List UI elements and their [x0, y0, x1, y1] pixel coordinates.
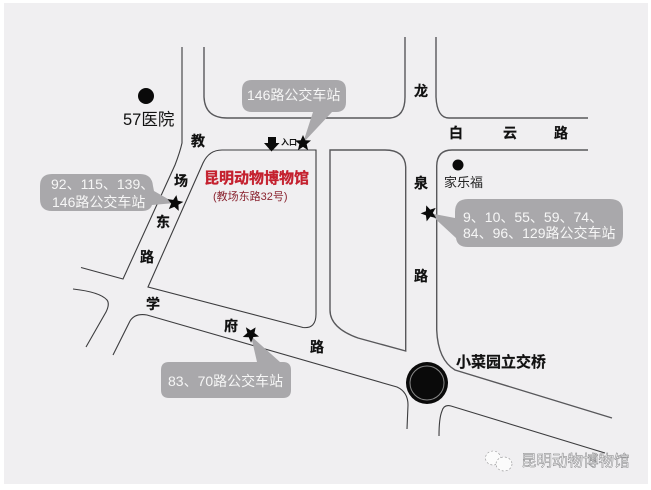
callout: 9 10 55 59 74 84 96 129 bus stop: 84、96、129路公交车站: [463, 225, 616, 241]
road name: 白云路: 云: [503, 125, 517, 141]
icon: bus stop star on 教场东路: [166, 194, 184, 211]
landmark: Carrefour: [444, 160, 483, 190]
museum name: [204, 169, 309, 203]
road name: 教场东路: 场: [174, 173, 188, 189]
callout: 83 70 bus stop: [161, 336, 291, 398]
overpass label: 小菜园立交桥: [456, 353, 546, 371]
road name: 学府路: 路: [310, 339, 324, 355]
road name: 学府路: [146, 296, 324, 355]
road name: 教场东路: 东: [156, 214, 170, 230]
museum name: 昆明动物博物馆: [204, 169, 309, 187]
callout: 92 115 139 146 bus stop: 146路公交车站: [52, 194, 145, 210]
landmark: 57 hospital: 57医院: [123, 110, 174, 129]
entrance arrow and label: 入口: [281, 138, 297, 147]
watermark: WeChat logo: [486, 451, 512, 471]
road name: 龙泉路: 龙: [414, 83, 428, 99]
watermark: account name: 昆明动物博物馆: [521, 452, 630, 470]
road name: 白云路: 白: [449, 125, 463, 141]
road name: 白云路: [449, 125, 568, 141]
landmark: 57 hospital: [123, 88, 174, 129]
road name: 龙泉路: 路: [414, 268, 428, 284]
road name: 龙泉路: [414, 83, 428, 284]
callout: 92 115 139 146 bus stop: 92、115、139、: [51, 176, 154, 192]
road name: 学府路: 学: [146, 296, 160, 312]
road name: 教场东路: 路: [140, 249, 154, 265]
callout: 9 10 55 59 74 84 96 129 bus stop: 9、10、55、59、74、: [463, 209, 603, 225]
callout: 146 bus stop: [242, 80, 346, 143]
road name: 教场东路: 教: [191, 133, 205, 149]
road name: 教场东路: [140, 133, 205, 265]
icon: bus stop star on 龙泉路: [419, 203, 439, 222]
callout: 146 bus stop: 146路公交车站: [247, 87, 340, 103]
callout: 92 115 139 146 bus stop: [40, 174, 175, 211]
road name: 龙泉路: 泉: [414, 175, 428, 191]
callout: 83 70 bus stop: 83、70路公交车站: [168, 373, 283, 389]
landmark: Carrefour: 家乐福: [444, 175, 483, 190]
overpass: 小菜园立交桥 circle: [406, 362, 448, 404]
road network: [73, 37, 612, 453]
icon: bus stop star on 学府路: [240, 323, 262, 344]
entrance arrow and label: [264, 137, 297, 152]
callout: 9 10 55 59 74 84 96 129 bus stop: [429, 199, 623, 247]
road name: 学府路: 府: [224, 318, 238, 334]
icon: bus stop star at entrance: [295, 135, 311, 150]
road name: 白云路: 路: [554, 125, 568, 141]
museum name: (教场东路32号): [213, 189, 288, 203]
